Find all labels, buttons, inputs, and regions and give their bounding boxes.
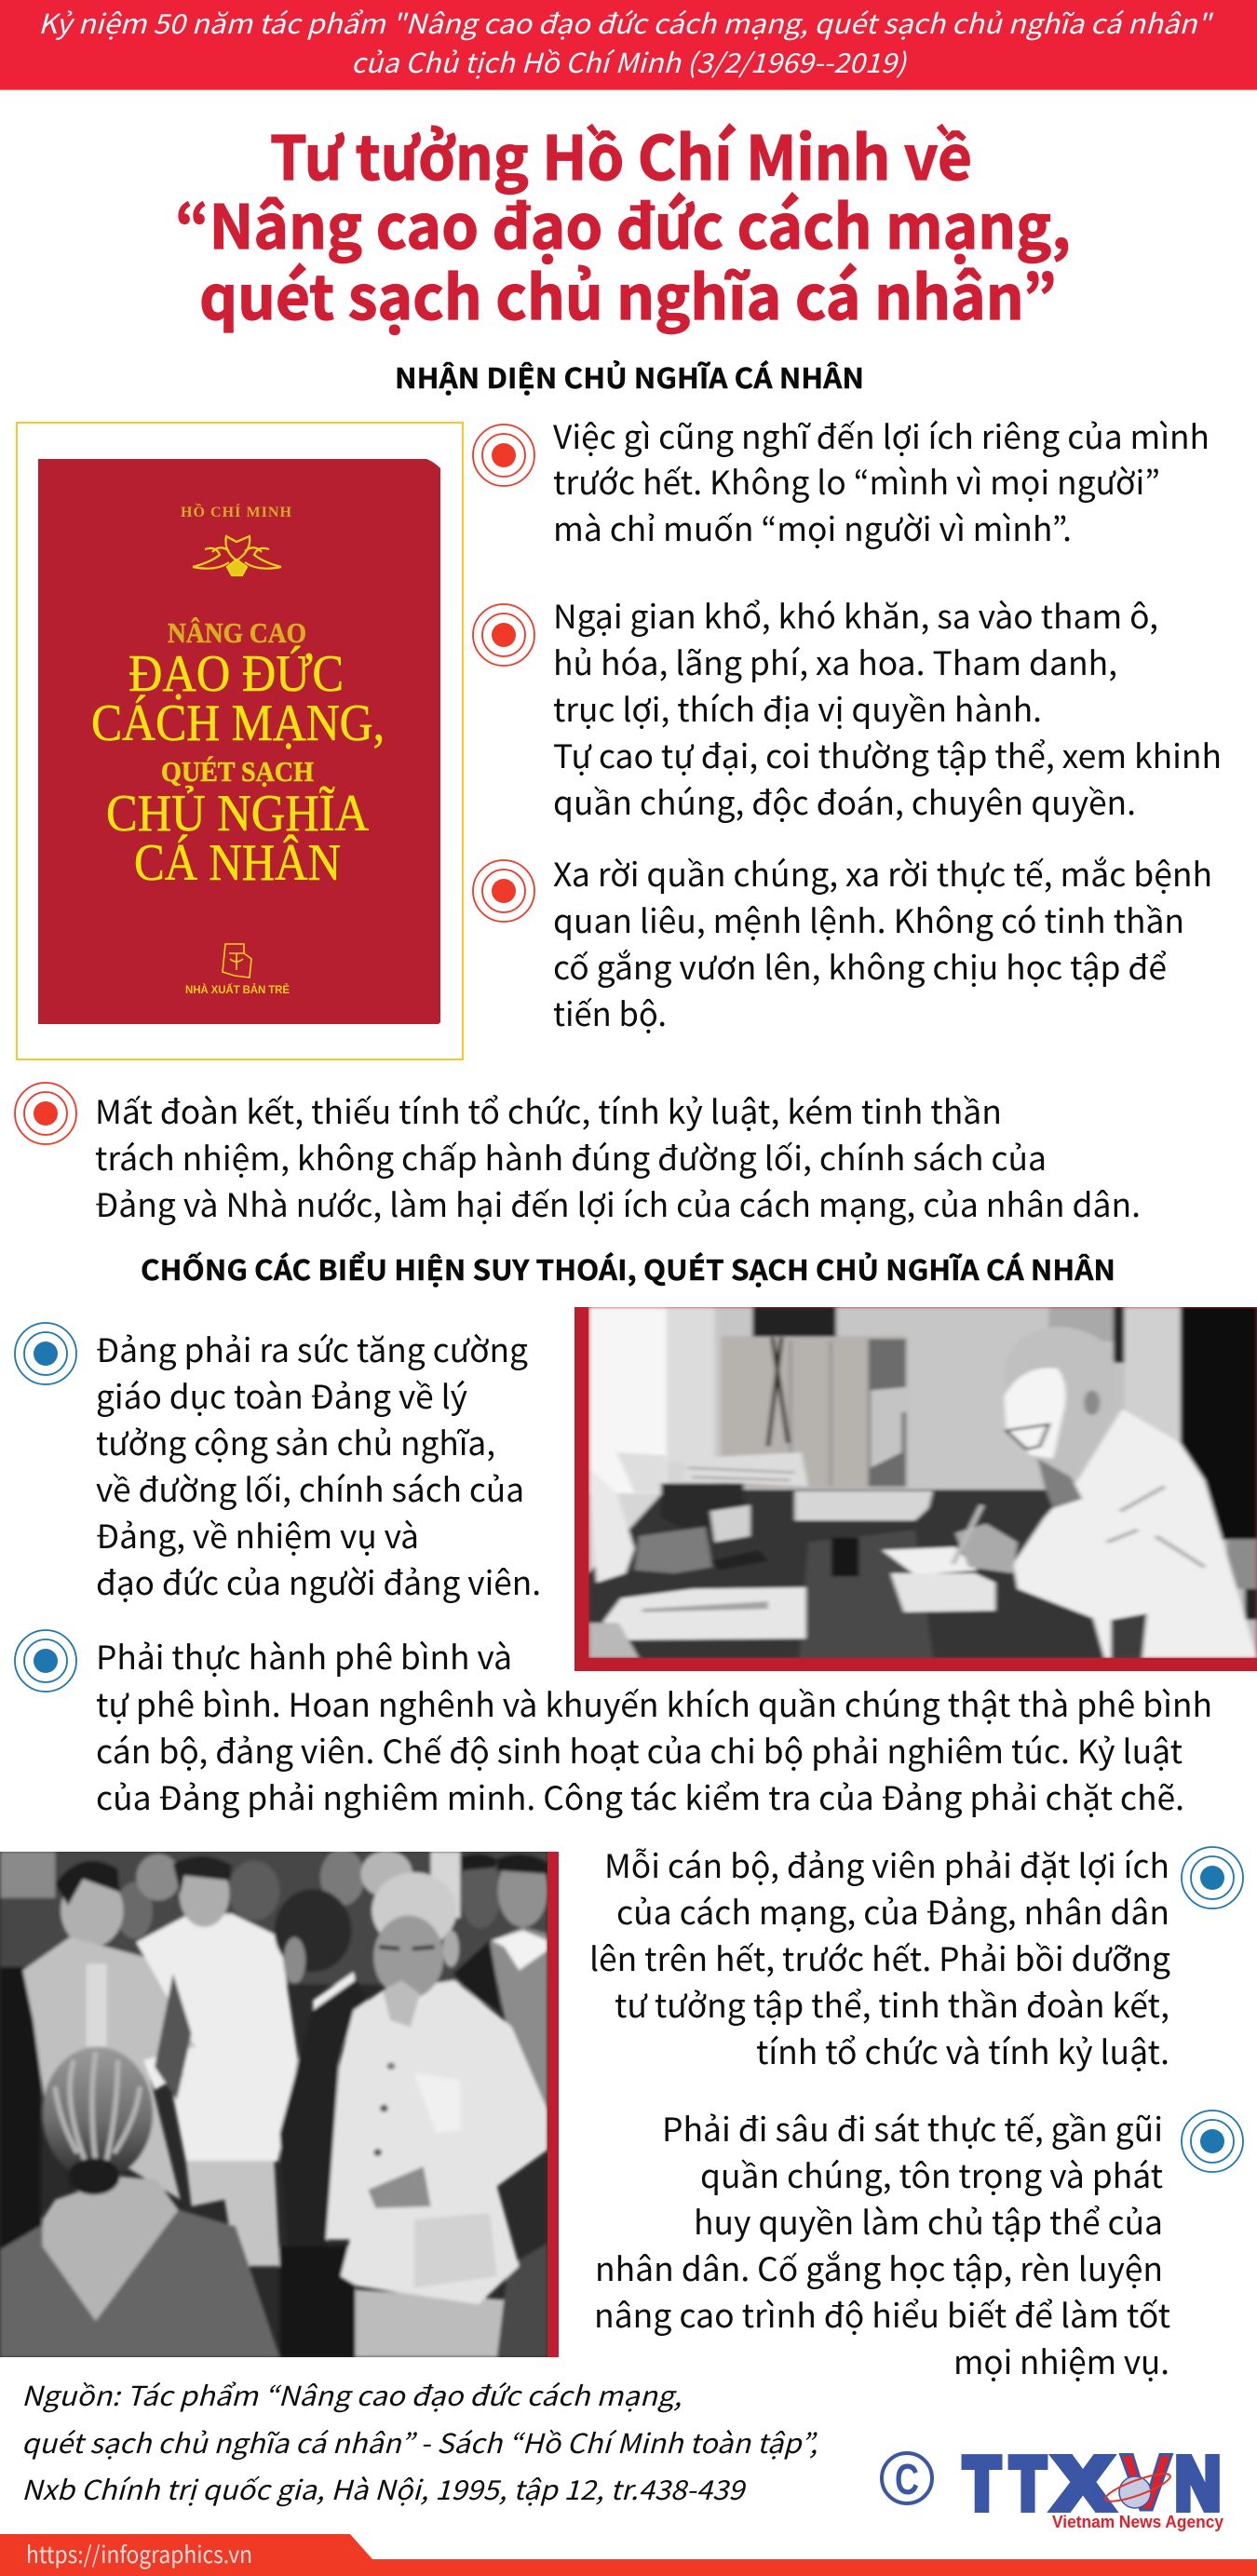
man centre (136, 1914, 298, 2162)
icon: publisher logo (223, 944, 251, 978)
bullet and text 4: Mất đoàn kết, thiếu tính tổ chức, tính kỷ luật, kém tinh thần (95, 1086, 1002, 1134)
TTXVN logo: T (964, 2442, 1000, 2525)
bullet and text 8: mọi nhiệm vụ. (953, 2337, 1169, 2384)
TTXVN logo: N (1175, 2442, 1221, 2525)
bullet and text 8: quần chúng, tôn trọng và phát (700, 2151, 1163, 2198)
bullet and text 3: tiến bộ. (553, 989, 667, 1036)
bullet and text 2: trục lợi, thích địa vị quyền hành. (553, 684, 1042, 732)
book cover: CHỦ NGHĨA (106, 785, 369, 843)
TTXVN logo (964, 2438, 1223, 2531)
bullet and text 8 (594, 2104, 1243, 2384)
bullet and text 8: nhân dân. Cố gắng học tập, rèn luyện (595, 2244, 1163, 2291)
bullet and text 2: quần chúng, độc đoán, chuyên quyền. (553, 777, 1136, 825)
book cover (38, 459, 440, 1024)
book cover: NHÀ XUẤT BẢN TRẺ (185, 984, 290, 996)
bullet and text 4: Đảng và Nhà nước, làm hại đến lợi ích của cách mạng, của nhân dân. (95, 1180, 1141, 1227)
source text (21, 2375, 818, 2508)
footer bar (0, 2534, 1257, 2576)
bullet and text 3: cố gắng vươn lên, không chịu học tập để (553, 942, 1167, 990)
bullet and text 5: Đảng, về nhiệm vụ và (96, 1511, 419, 1558)
bullet and text 1: trước hết. Không lo “mình vì mọi người” (553, 457, 1160, 505)
bullet and text 2 (473, 591, 1222, 825)
man dark suit (280, 1977, 368, 2246)
title: “Nâng cao đạo đức cách mạng, (175, 179, 1071, 266)
bullet and text 7: lên trên hết, trước hết. Phải bồi dưỡng (589, 1934, 1170, 1981)
book cover: CÁCH MẠNG, (91, 695, 385, 752)
TTXVN logo: X (1054, 2442, 1112, 2525)
bullet and text 1: Việc gì cũng nghĩ đến lợi ích riêng của mình (553, 411, 1210, 459)
bullet and text 2: hủ hóa, lãng phí, xa hoa. Tham danh, (553, 638, 1117, 685)
heading: identifying individualism: NHẬN DIỆN CHỦ NGHĨA CÁ NHÂN (395, 356, 864, 397)
bullet and text 7 (589, 1841, 1243, 2074)
bullet and text 4: trách nhiệm, không chấp hành đúng đường lối, chính sách của (95, 1133, 1047, 1180)
bullet and text 5: tưởng cộng sản chủ nghĩa, (96, 1418, 495, 1465)
bullet and text 5: đạo đức của người đảng viên. (96, 1558, 541, 1605)
bullet and text 5: giáo dục toàn Đảng về lý (96, 1371, 467, 1419)
icon: ornament (193, 536, 281, 575)
book cover: HỒ CHÍ MINH (181, 502, 292, 520)
book cover: CÁ NHÂN (134, 834, 341, 892)
lower dark and Ho Chi Minh figure (280, 2246, 356, 2357)
TTXVN logo: T (1010, 2442, 1046, 2525)
source text: quét sạch chủ nghĩa cá nhân” - Sách “Hồ Chí Minh toàn tập”, (21, 2422, 818, 2461)
bullet and text 1 (473, 411, 1210, 551)
bullet and text 8: nâng cao trình độ hiểu biết để làm tốt (594, 2290, 1170, 2338)
source text: Nxb Chính trị quốc gia, Hà Nội, 1995, tập 12, tr.438-439 (21, 2469, 747, 2508)
bullet and text 4 (15, 1083, 1141, 1227)
bullet and text 7: tư tưởng tập thể, tinh thần đoàn kết, (615, 1980, 1169, 2028)
man left (61, 1874, 123, 1947)
bullet and text 5: Đảng phải ra sức tăng cường (96, 1325, 528, 1372)
source text: Nguồn: Tác phẩm “Nâng cao đạo đức cách mạng, (21, 2375, 682, 2414)
copyright mark: C (895, 2455, 919, 2503)
photo: writing at desk (574, 1307, 1257, 1671)
Ho Chi Minh figure (1013, 1409, 1257, 1658)
woman (0, 2210, 280, 2357)
book cover: ĐẠO ĐỨC (128, 644, 344, 703)
bullet and text 7: tính tổ chức và tính kỷ luật. (756, 2027, 1169, 2074)
bullet and text 3: Xa rời quần chúng, xa rời thực tế, mắc bệnh (553, 849, 1212, 897)
title (175, 110, 1071, 337)
header band: Kỷ niệm 50 năm tác phẩm "Nâng cao đạo đức cách mạng, quét sạch chủ nghĩa cá nhân" (38, 3, 1213, 42)
book cover: NÂNG CAO (168, 616, 306, 649)
bullet and text 3 (473, 849, 1212, 1036)
book cover: QUÉT SẠCH (161, 755, 314, 788)
bullet and text 6: của Đảng phải nghiêm minh. Công tác kiểm tra của Đảng phải chặt chẽ. (96, 1773, 1184, 1820)
header band: của Chủ tịch Hồ Chí Minh (3/2/1969--2019) (351, 42, 907, 81)
bullet and text 8: huy quyền làm chủ tập thể của (694, 2197, 1163, 2245)
title: Tư tưởng Hồ Chí Minh về (270, 110, 972, 197)
title: quét sạch chủ nghĩa cá nhân” (199, 250, 1057, 337)
bullet and text 7: Mỗi cán bộ, đảng viên phải đặt lợi ích (604, 1841, 1169, 1888)
bullet and text 5: về đường lối, chính sách của (96, 1464, 524, 1512)
copyright mark (882, 2453, 932, 2503)
heading: fighting degradation: CHỐNG CÁC BIỂU HIỆN SUY THOÁI, QUÉT SẠCH CHỦ NGHĨA CÁ NHÂN (141, 1248, 1115, 1288)
bullet and text 5 (15, 1323, 541, 1605)
footer bar: https://infographics.vn (26, 2537, 252, 2570)
panel: book cover frame (17, 423, 463, 1059)
bullet and text 6 (15, 1630, 1212, 1820)
bullet and text 8: Phải đi sâu đi sát thực tế, gần gũi (662, 2104, 1163, 2151)
TTXVN logo: V (1120, 2438, 1172, 2528)
bullet and text 1: mà chỉ muốn “mọi người vì mình”. (553, 504, 1072, 551)
header band (0, 0, 1257, 90)
bullet and text 6: tự phê bình. Hoan nghênh và khuyến khích quần chúng thật thà phê bình (96, 1679, 1212, 1727)
TTXVN logo: Vietnam News Agency (1052, 2513, 1223, 2531)
photo: meeting the people (0, 1849, 559, 2357)
bullet and text 2: Tự cao tự đại, coi thường tập thể, xem khinh (553, 731, 1222, 778)
bullet and text 3: quan liêu, mệnh lệnh. Không có tinh thần (553, 896, 1184, 943)
bullet and text 2: Ngại gian khổ, khó khăn, sa vào tham ô, (553, 591, 1158, 639)
icon: globe (1102, 2469, 1173, 2508)
bullet and text 6: Phải thực hành phê bình và (96, 1632, 512, 1679)
bullet and text 7: của cách mạng, của Đảng, nhân dân (616, 1887, 1169, 1935)
bullet and text 6: cán bộ, đảng viên. Chế độ sinh hoạt của chi bộ phải nghiêm túc. Kỷ luật (96, 1726, 1183, 1774)
